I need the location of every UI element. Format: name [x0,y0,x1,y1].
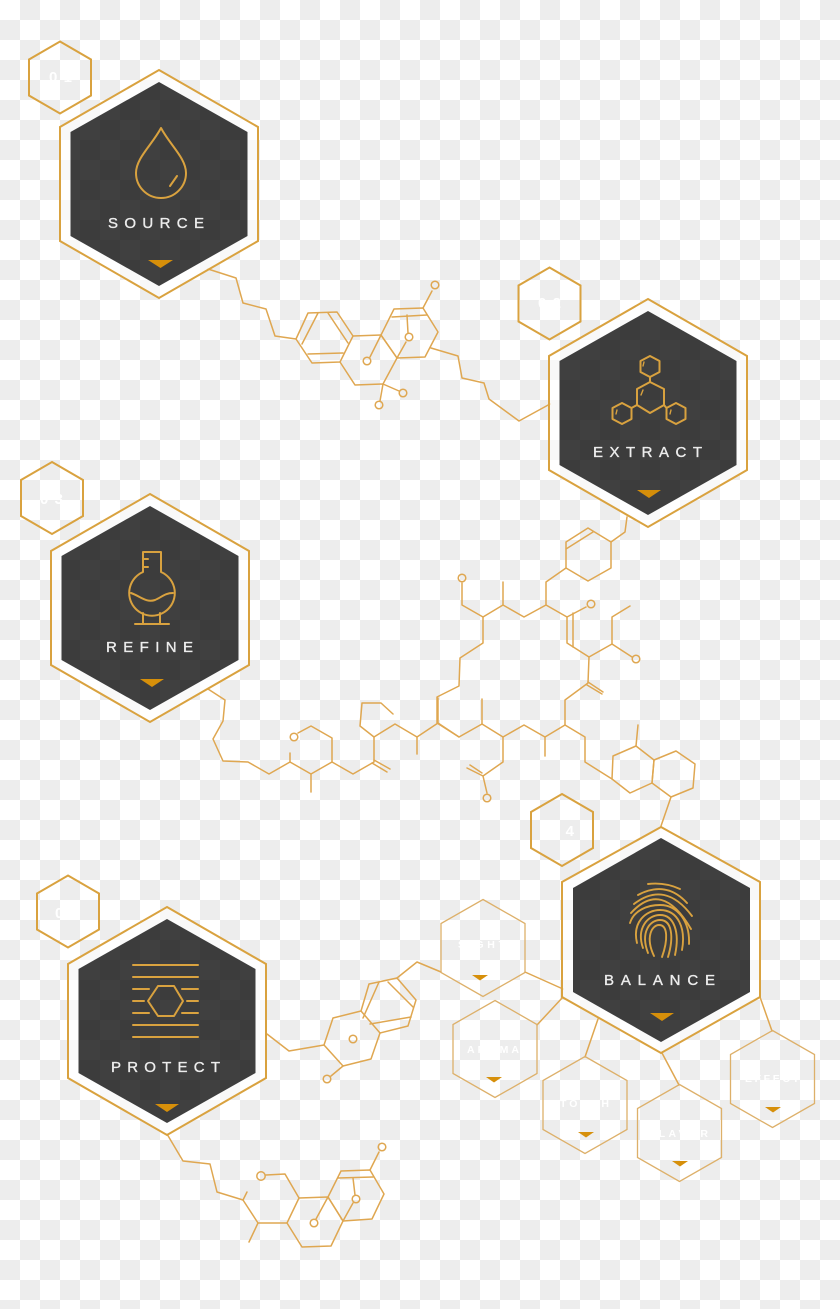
number hexagon 02: 02 [538,295,561,312]
sub-hexagon: flavor [638,1084,722,1182]
heading: source: SOURCE [108,215,204,232]
marker: balance arrow [650,1013,674,1021]
molecule: protect lower [167,1134,386,1247]
molecule: source to extract [208,269,550,421]
sub-hexagon: sight [441,900,525,996]
panel: source [60,70,258,298]
heading: protect: PROTECT [111,1059,220,1076]
marker: protect arrow [155,1104,179,1112]
number hexagon 01 [29,42,91,114]
number hexagon 04 [531,794,593,866]
icon: shield lines [133,965,198,1037]
panel: extract [549,299,747,527]
sub-hexagon: touch [543,1056,627,1154]
sub-hexagon: effect: EFFECT [745,1073,800,1085]
molecule: protect to sight [267,962,441,1083]
number hexagon 05 [37,876,99,948]
molecule: refine chain [208,689,459,792]
icon: fingerprint [630,884,692,957]
marker: source arrow [148,260,173,268]
number hexagon 03 [21,462,83,534]
sub-hexagon: flavor: FLAVOR [649,1128,708,1140]
marker: extract arrow [637,490,661,498]
molecule: extract to refine and balance [437,517,695,826]
number hexagon 04: 04 [551,823,575,840]
heading: refine: REFINE [106,639,193,656]
sub-hexagon: aroma [453,1000,537,1098]
heading: extract: EXTRACT [593,444,702,461]
number hexagon 01: 01 [49,69,72,86]
number hexagon 05: 05 [55,905,78,922]
number hexagon 03: 03 [40,491,63,508]
sub-hexagon: sight: SIGHT [458,939,506,951]
panel: refine [51,494,249,722]
panel: balance [562,827,760,1053]
sub-hexagon: effect [730,1030,814,1128]
number hexagon 02 [518,268,580,340]
marker: refine arrow [140,679,164,687]
sub-hexagon: touch: TOUCH [560,1098,609,1110]
heading: balance: BALANCE [604,972,715,989]
icon: molecule [612,356,686,424]
connectors: balance to sub-hexagons [525,972,772,1085]
icon: oil drop [136,128,186,198]
sub-hexagon: aroma: AROMA [467,1044,519,1056]
icon: flask [129,552,175,624]
panel: protect [68,907,266,1135]
